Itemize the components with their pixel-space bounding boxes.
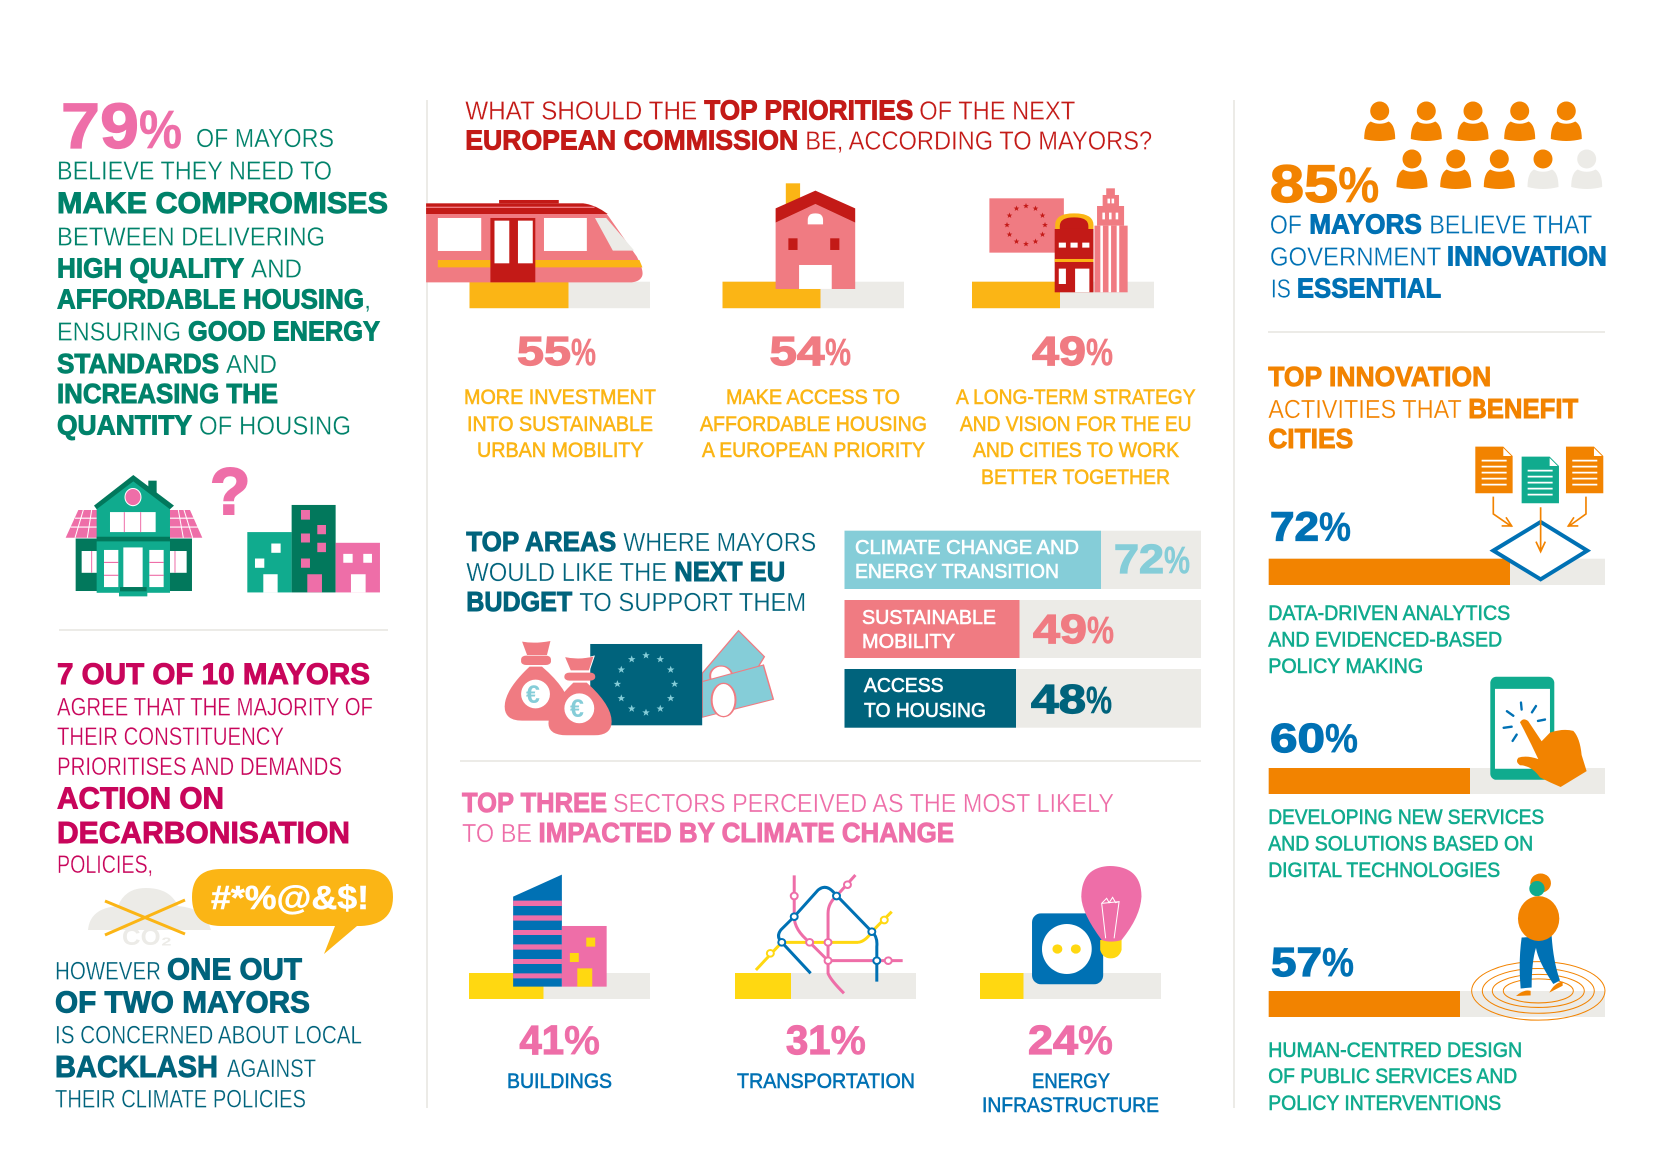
panel: housing compromises text: GOOD ENERGY xyxy=(188,316,380,347)
stat: 57% human-centred xyxy=(1271,939,1354,985)
heading: next EU budget: WOULD LIKE THE xyxy=(466,557,667,587)
stat: 49% strategy xyxy=(1032,328,1113,374)
panel: housing compromises text: MAKE COMPROMISES xyxy=(57,187,388,220)
panel: backlash text: AGAINST xyxy=(227,1055,316,1083)
icon: documents flowing into diamond xyxy=(1475,447,1603,579)
stat: 57% human-centred: % xyxy=(1322,939,1354,985)
panel: decarbonisation demands text: AGREE THAT THE MAJORITY OF xyxy=(57,694,373,722)
panel: decarbonisation demands text: ACTION ON xyxy=(57,780,224,816)
heading: top innovation activities: BENEFIT xyxy=(1468,393,1578,424)
panel: housing compromises text: OF MAYORS xyxy=(196,123,334,153)
icon: apartment buildings xyxy=(247,505,380,592)
bar: sustainable mobility 49%: SUSTAINABLE xyxy=(862,606,996,629)
bar: access to housing 48% xyxy=(844,669,1201,728)
heading: next EU budget: NEXT EU xyxy=(674,556,785,587)
icon: question mark: ? xyxy=(210,454,250,528)
stat: 49% strategy: % xyxy=(1086,332,1113,374)
panel: backlash text: THEIR CLIMATE POLICIES xyxy=(55,1086,306,1114)
stat: 41% buildings: BUILDINGS xyxy=(507,1069,612,1093)
panel: decarbonisation demands text: PRIORITISES AND DEMANDS xyxy=(57,753,342,781)
text: data-driven analytics: DATA-DRIVEN ANALYTICS xyxy=(1268,601,1510,625)
icon: house xyxy=(776,183,855,289)
heading: sectors impacted by climate change: TOP THREE xyxy=(462,787,607,818)
icon: metro map xyxy=(756,875,903,993)
bar: access to housing 48%: 48 xyxy=(1031,676,1086,722)
text: government innovation: MAYORS xyxy=(1309,208,1422,240)
panel: housing compromises text: OF HOUSING xyxy=(199,411,351,441)
text: government innovation: OF xyxy=(1270,210,1302,240)
stat: 79%: % xyxy=(139,100,182,160)
stat: 54% housing xyxy=(770,328,851,374)
text: data-driven analytics: AND EVIDENCED-BASED xyxy=(1268,628,1502,652)
text: more investment: INTO SUSTAINABLE xyxy=(467,412,653,436)
text: human-centred design: HUMAN-CENTRED DESIGN xyxy=(1268,1038,1522,1062)
panel: backlash text: OF TWO MAYORS xyxy=(55,984,310,1020)
stat: 79% xyxy=(61,90,182,162)
text: long-term strategy: AND VISION FOR THE EU xyxy=(960,412,1192,436)
stat: 85%: 85 xyxy=(1270,155,1338,214)
stat: 31% transportation xyxy=(737,1017,915,1093)
text: long-term strategy: AND CITIES TO WORK xyxy=(973,438,1180,462)
panel: housing compromises text: AND xyxy=(226,349,277,379)
text: new services and solutions: DIGITAL TECHNOLOGIES xyxy=(1268,858,1500,882)
heading: next EU budget xyxy=(466,526,816,617)
stat: 41% buildings: % xyxy=(564,1017,600,1063)
bar: access to housing 48%: TO HOUSING xyxy=(864,699,986,722)
panel: housing compromises text: HIGH QUALITY xyxy=(57,253,244,284)
callout: speech bubble xyxy=(192,869,393,954)
callout: speech bubble: #*%@&$! xyxy=(211,879,369,916)
text: human-centred design xyxy=(1268,1038,1522,1115)
panel: decarbonisation demands text: POLICIES, xyxy=(57,851,153,879)
icon: money bags, EU flag and banknotes xyxy=(505,631,773,735)
stat: 24% energy infrastructure: 24 xyxy=(1028,1017,1078,1063)
panel: backlash text: ONE OUT xyxy=(167,952,302,986)
icon: socket and light bulb xyxy=(1032,866,1141,984)
stat: 41% buildings xyxy=(507,1017,612,1093)
icon: train xyxy=(426,200,643,282)
stat: 31% transportation: TRANSPORTATION xyxy=(737,1069,915,1093)
bar: climate change 72%: 72 xyxy=(1114,536,1164,582)
chart: 54% progress bar xyxy=(722,282,904,308)
text: long-term strategy: BETTER TOGETHER xyxy=(981,465,1170,489)
heading: top innovation activities xyxy=(1268,361,1578,454)
text: affordable housing priority: A EUROPEAN PRIORITY xyxy=(702,438,925,462)
icon: money bags, EU flag and banknotes: € xyxy=(526,681,540,709)
stat: 55% mobility xyxy=(517,328,596,374)
panel: housing compromises text: INCREASING THE xyxy=(57,378,278,409)
text: more investment: MORE INVESTMENT xyxy=(464,385,656,409)
panel: decarbonisation demands text: DECARBONISATION xyxy=(57,815,350,850)
text: government innovation xyxy=(1270,208,1607,304)
chart: 60% progress bar xyxy=(1269,768,1605,794)
heading: sectors impacted by climate change: SECTORS PERCEIVED AS THE MOST LIKELY xyxy=(613,788,1114,818)
bar: sustainable mobility 49%: MOBILITY xyxy=(862,630,955,653)
stat: 72% data-driven: % xyxy=(1319,504,1351,550)
icon: hand tapping phone xyxy=(1490,677,1587,787)
stat: 54% housing: % xyxy=(825,332,851,374)
stat: 85%: % xyxy=(1338,157,1379,213)
text: government innovation: BELIEVE THAT xyxy=(1429,210,1592,240)
panel: housing compromises text: BELIEVE THEY NEED TO xyxy=(57,156,332,186)
text: data-driven analytics: POLICY MAKING xyxy=(1268,654,1423,678)
heading: next EU budget: BUDGET xyxy=(466,586,572,617)
stat: 24% energy infrastructure xyxy=(982,1017,1159,1117)
stat: 24% energy infrastructure: ENERGY xyxy=(1032,1069,1110,1093)
panel: housing compromises text: QUANTITY xyxy=(57,410,192,441)
heading: next EU budget: TOP AREAS xyxy=(466,526,616,557)
text: new services and solutions xyxy=(1268,805,1544,882)
bar: sustainable mobility 49%: % xyxy=(1087,610,1114,652)
heading: top priorities xyxy=(465,94,1152,155)
chart: 57% progress bar xyxy=(1269,991,1605,1017)
bar: access to housing 48%: % xyxy=(1086,680,1112,722)
bar: climate change 72%: % xyxy=(1164,540,1190,582)
panel: housing compromises text: AND xyxy=(251,254,302,284)
stat: 60% digital xyxy=(1270,715,1358,761)
chart: 55% progress bar xyxy=(470,282,650,308)
heading: top priorities: WHAT SHOULD THE xyxy=(465,95,697,125)
bar: access to housing 48%: ACCESS xyxy=(864,674,944,697)
heading: next EU budget: WHERE MAYORS xyxy=(623,527,816,557)
panel: housing compromises text: AFFORDABLE HOUSING xyxy=(57,284,364,315)
panel: backlash text: BACKLASH xyxy=(55,1049,218,1084)
bar: sustainable mobility 49% xyxy=(844,600,1201,658)
stat: 54% housing: 54 xyxy=(770,328,825,374)
text: affordable housing priority xyxy=(700,385,927,462)
panel: backlash text: HOWEVER xyxy=(55,958,161,986)
heading: next EU budget: TO SUPPORT THEM xyxy=(579,587,806,617)
stat: 85% xyxy=(1270,155,1379,214)
heading: top priorities: BE, ACCORDING TO MAYORS? xyxy=(805,125,1152,155)
heading: top innovation activities: ACTIVITIES THAT xyxy=(1268,394,1462,424)
bar: climate change 72%: ENERGY TRANSITION xyxy=(855,560,1059,583)
text: government innovation: INNOVATION xyxy=(1447,240,1607,272)
stat: 60% digital: 60 xyxy=(1270,715,1325,761)
icon: office buildings xyxy=(513,875,607,987)
text: government innovation: ESSENTIAL xyxy=(1297,272,1441,304)
text: human-centred design: POLICY INTERVENTIONS xyxy=(1268,1091,1501,1115)
heading: sectors impacted by climate change: IMPACTED BY CLIMATE CHANGE xyxy=(538,817,954,848)
chart: 72% progress bar xyxy=(1269,559,1605,585)
stat: 31% transportation: % xyxy=(830,1017,866,1063)
heading: top priorities: EUROPEAN COMMISSION xyxy=(465,124,798,155)
panel: backlash text: IS CONCERNED ABOUT LOCAL xyxy=(55,1022,362,1050)
text: human-centred design: OF PUBLIC SERVICES AND xyxy=(1268,1064,1517,1088)
stat: 79%: 79 xyxy=(61,90,139,162)
text: affordable housing priority: MAKE ACCESS TO xyxy=(726,385,900,409)
text: more investment xyxy=(464,385,656,462)
stat: 31% transportation: 31 xyxy=(786,1017,830,1063)
panel: decarbonisation demands text: 7 OUT OF 10 MAYORS xyxy=(57,658,370,691)
chart: 41% progress bar xyxy=(469,973,650,999)
heading: sectors impacted by climate change xyxy=(462,787,1114,848)
text: government innovation: IS xyxy=(1271,274,1291,304)
text: new services and solutions: DEVELOPING NEW SERVICES xyxy=(1268,805,1544,829)
chart: 49% progress bar xyxy=(972,282,1154,308)
icon: house with solar panels xyxy=(66,475,202,596)
stat: 72% data-driven xyxy=(1270,504,1351,550)
heading: sectors impacted by climate change: TO BE xyxy=(462,818,532,848)
chart: 24% progress bar xyxy=(980,973,1161,999)
text: new services and solutions: AND SOLUTIONS BASED ON xyxy=(1268,832,1533,856)
text: long-term strategy: A LONG-TERM STRATEGY xyxy=(956,385,1196,409)
panel: housing compromises text: BETWEEN DELIVERING xyxy=(57,222,325,252)
heading: top priorities: OF THE NEXT xyxy=(919,95,1075,125)
stat: 55% mobility: 55 xyxy=(517,328,571,374)
panel: decarbonisation demands text xyxy=(57,658,373,879)
heading: top priorities: TOP PRIORITIES xyxy=(704,94,913,125)
bar: climate change 72%: CLIMATE CHANGE AND xyxy=(855,536,1079,559)
icon: EU flag and city buildings xyxy=(989,188,1128,292)
heading: top innovation activities: CITIES xyxy=(1268,423,1353,454)
icon: crossed-out CO2 cloud: CO₂ xyxy=(122,924,172,951)
text: data-driven analytics xyxy=(1268,601,1510,678)
panel: backlash text xyxy=(55,952,362,1114)
stat: 24% energy infrastructure: INFRASTRUCTURE xyxy=(982,1093,1159,1117)
bar: sustainable mobility 49%: 49 xyxy=(1033,606,1087,652)
chart: 31% progress bar xyxy=(735,973,916,999)
panel: housing compromises text: STANDARDS xyxy=(57,348,219,379)
text: affordable housing priority: AFFORDABLE HOUSING xyxy=(700,412,927,436)
stat: 60% digital: % xyxy=(1325,715,1358,761)
stat: 24% energy infrastructure: % xyxy=(1078,1017,1113,1063)
icon: money bags, EU flag and banknotes: € xyxy=(570,695,584,723)
stat: 49% strategy: 49 xyxy=(1032,328,1086,374)
text: more investment: URBAN MOBILITY xyxy=(477,438,644,462)
panel: housing compromises text: ENSURING xyxy=(57,317,181,347)
panel: decarbonisation demands text: THEIR CONSTITUENCY xyxy=(57,723,284,751)
bar: climate change 72% xyxy=(844,531,1201,589)
icon: crossed-out CO2 cloud xyxy=(88,888,211,951)
heading: top innovation activities: TOP INNOVATION xyxy=(1268,361,1491,392)
stat: 41% buildings: 41 xyxy=(520,1017,564,1063)
text: government innovation: GOVERNMENT xyxy=(1270,242,1441,272)
icon: person on target rings xyxy=(1472,873,1605,1020)
icon: people pictogram 85% xyxy=(1364,102,1602,189)
stat: 72% data-driven: 72 xyxy=(1270,504,1319,550)
panel: housing compromises text: , xyxy=(364,285,371,315)
stat: 57% human-centred: 57 xyxy=(1271,939,1322,985)
text: long-term strategy xyxy=(956,385,1196,489)
panel: housing compromises text xyxy=(57,90,388,441)
stat: 55% mobility: % xyxy=(571,332,596,374)
